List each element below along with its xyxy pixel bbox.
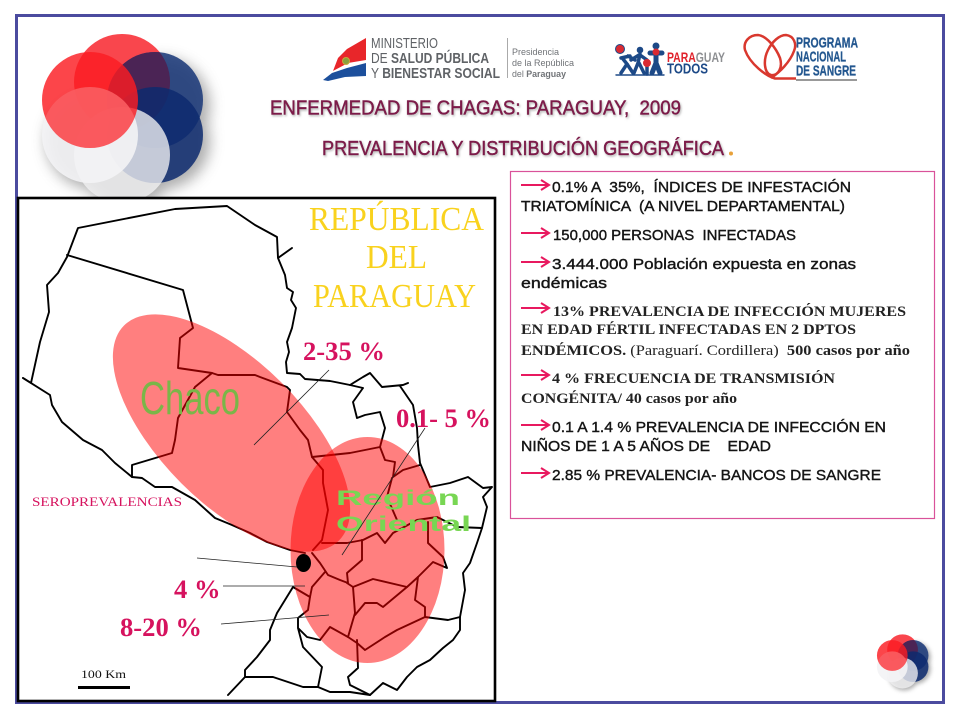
map borders: [23, 206, 492, 695]
wordmark: [796, 34, 858, 80]
panel: key facts: [510, 172, 934, 518]
wordmark: DE SANGRE: [796, 62, 856, 80]
region ellipse: Chaco: [74, 275, 389, 591]
logo: Ministerio de Salud: [323, 35, 575, 82]
fact: children prevalence: 0.1 A 1.4 % PREVALENCIA DE INFECCIÓN EN: [552, 419, 886, 436]
fact: blood banks: 2.85 % PREVALENCIA- BANCOS DE SANGRE: [552, 467, 881, 484]
fact: infestation: 0.1% A 35%, ÍNDICES DE INFESTACIÓN: [552, 179, 851, 196]
heading: República del Paraguay: [309, 200, 484, 315]
label: seroprevalencias: SEROPREVALENCIAS: [32, 494, 182, 509]
ministry name: [371, 35, 500, 82]
logo: Paraguay Todos: TODOS: [667, 60, 708, 78]
ministry name: DE SALUD PÚBLICA: [371, 49, 489, 67]
heading: República del Paraguay: PARAGUAY: [313, 278, 476, 315]
title line 2: PREVALENCIA Y DISTRIBUCIÓN GEOGRÁFICA: [322, 137, 725, 160]
wordmark: PARAGUAY: [667, 49, 725, 65]
label: 2-35 %: 2-35 %: [303, 336, 385, 366]
fact: congenital transmission: CONGÉNITA/ 40 casos por año: [521, 390, 737, 407]
fact: exposed population: endémicas: [521, 275, 607, 292]
fact: infected people: 150,000 PERSONAS INFECTADAS: [553, 227, 796, 244]
fact: women prevalence: 13% PREVALENCIA DE INFECCIÓN MUJERES: [553, 303, 906, 320]
scale bar: [78, 667, 130, 689]
ministry name: Y BIENESTAR SOCIAL: [371, 65, 500, 82]
fact: exposed population: 3.444.000 Población expuesta en zonas: [552, 256, 856, 273]
fact: children prevalence: [521, 419, 886, 455]
fact: infestation: [521, 179, 851, 215]
icon: small circles logo: [877, 634, 931, 690]
logo: Paraguay Todos: [616, 43, 725, 78]
label: Región Oriental: Oriental: [336, 513, 471, 536]
icon: people figures: [616, 43, 664, 75]
wordmark: NACIONAL: [796, 48, 846, 66]
panel: map of Paraguay: [18, 198, 495, 701]
fact: congenital transmission: 4 % FRECUENCIA DE TRANSMISIÓN: [552, 370, 835, 387]
fact: women prevalence: EN EDAD FÉRTIL INFECTADAS EN 2 DPTOS: [521, 321, 856, 338]
presidency text: de la República: [512, 58, 575, 69]
fact: women prevalence: ENDÉMICOS. (Paraguarí. Cordillera) 500 casos por año: [521, 342, 910, 359]
fact: exposed population: [521, 256, 856, 292]
logo: Programa Nacional de Sangre: [745, 34, 858, 81]
region ellipse: Región Oriental: [290, 437, 444, 663]
label: Región Oriental: [336, 487, 471, 536]
fact: children prevalence: NIÑOS DE 1 A 5 AÑOS DE EDAD: [521, 438, 771, 455]
marker: Asunción dot: [296, 554, 311, 572]
fact: congenital transmission: [521, 370, 835, 407]
icon: heart ribbon: [745, 35, 796, 78]
label: Chaco: Chaco: [140, 372, 240, 424]
label: Región Oriental: Región: [336, 487, 460, 510]
label: 0.1-5 %: 0.1- 5 %: [396, 403, 491, 433]
ministry name: MINISTERIO: [371, 35, 438, 52]
heading: República del Paraguay: DEL: [366, 239, 427, 276]
fact: women prevalence: [521, 303, 910, 359]
leader lines: [197, 370, 425, 624]
heading: República del Paraguay: REPÚBLICA: [309, 200, 484, 238]
label: 4 %: 4 %: [174, 574, 221, 604]
presidency text: del Paraguay: [512, 69, 567, 80]
title line 1: ENFERMEDAD DE CHAGAS: PARAGUAY, 2009: [270, 98, 681, 120]
presidency text: Presidencia: [512, 47, 560, 58]
label: 8-20 %: 8-20 %: [120, 612, 202, 642]
presidency text: [512, 47, 575, 80]
icon: large circles logo: [42, 34, 210, 209]
scale bar: 100 Km: [81, 667, 127, 681]
icon: Paraguay flag: [323, 38, 366, 81]
fact: infestation: TRIATOMÍNICA (A NIVEL DEPARTAMENTAL): [521, 198, 845, 215]
wordmark: PROGRAMA: [796, 34, 858, 52]
